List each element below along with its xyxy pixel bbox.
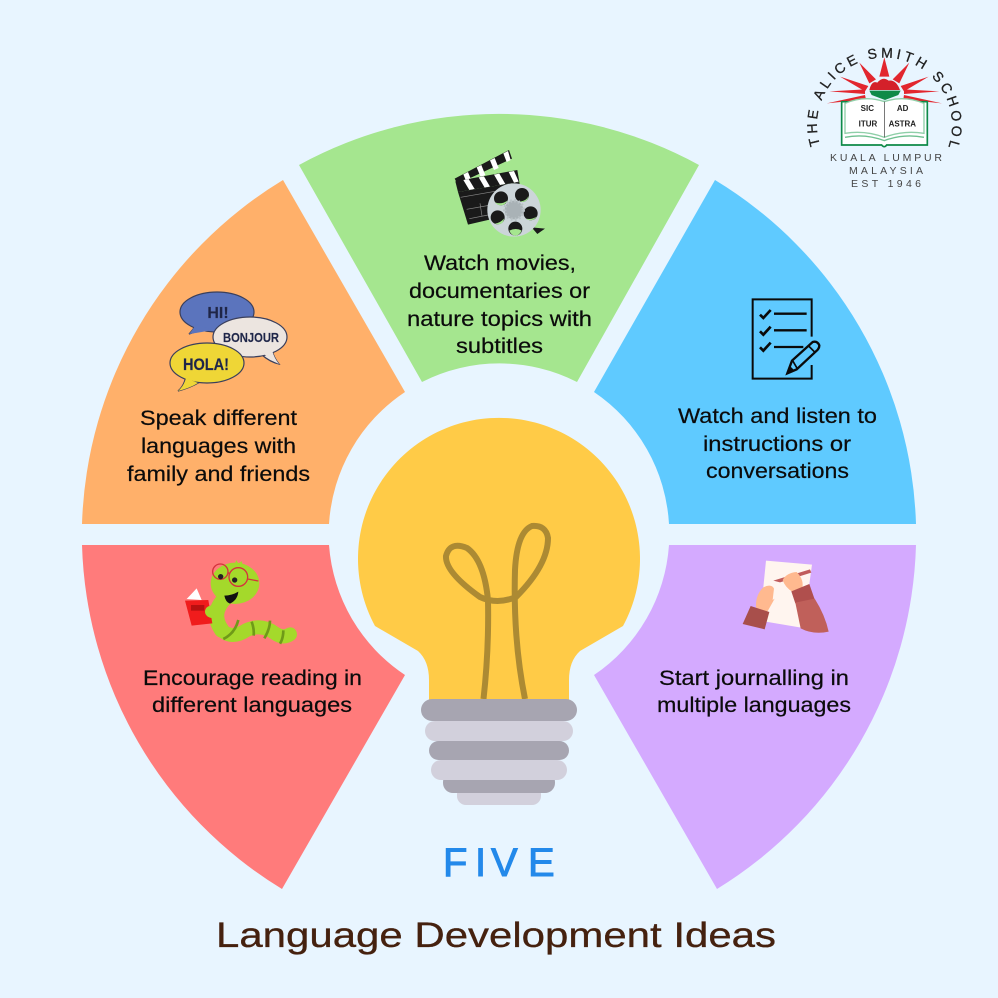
text: instructions caption (678, 405, 877, 483)
logo location text: KUALA LUMPUR (830, 152, 942, 164)
bubble: HI!: HI! (207, 305, 229, 322)
text: speaking caption (127, 407, 310, 486)
panel: movies (green) (299, 114, 699, 382)
heading: FIVE: FIVE (443, 841, 555, 885)
text: journalling caption: multiple languages (657, 694, 851, 717)
text: journalling caption (657, 667, 851, 717)
logo emblem: AD (897, 104, 909, 113)
bubble: BONJOUR: BONJOUR (223, 330, 280, 345)
text: speaking caption: family and friends (127, 463, 310, 486)
text: movies caption: Watch movies, (424, 252, 576, 275)
logo emblem: SIC (861, 104, 874, 113)
text: journalling caption: Start journalling in (659, 667, 849, 690)
bulb glass (358, 418, 640, 700)
panel: reading (red) (82, 545, 405, 889)
screw base (421, 699, 577, 805)
text: instructions caption: instructions or (703, 433, 851, 456)
text: movies caption: nature topics with (407, 308, 592, 331)
bubble: HOLA!: HOLA! (183, 355, 229, 374)
icon: clapperboard and film reel (455, 150, 545, 237)
logo arc lettering: THE ALICE SMITH SCHOOL (807, 48, 962, 148)
icon: checklist with pencil (753, 299, 819, 379)
icon: light bulb (358, 418, 640, 805)
icon: bookworm reading (185, 560, 290, 644)
logo location text: MALAYSIA (849, 165, 923, 177)
text: reading caption: Encourage reading in (143, 667, 362, 690)
text: speaking caption: languages with (141, 435, 296, 458)
logo emblem: ITUR (859, 120, 878, 129)
icon: hands writing on paper (743, 561, 829, 633)
logo emblem (827, 57, 942, 147)
logo: The Alice Smith School (807, 48, 962, 190)
text: movies caption: documentaries or (409, 280, 590, 303)
filament (446, 526, 548, 699)
text: instructions caption: Watch and listen to (678, 405, 877, 428)
text: speaking caption: Speak different (140, 407, 297, 430)
text: reading caption: different languages (152, 694, 352, 717)
panel: speaking (orange) (82, 180, 405, 524)
logo location text (830, 152, 942, 190)
panel: journalling (purple) (594, 545, 916, 889)
icon: speech bubbles (170, 292, 287, 391)
title: Language Development Ideas (216, 916, 776, 955)
logo emblem: ASTRA (889, 120, 916, 129)
text: movies caption (407, 252, 592, 358)
text: instructions caption: conversations (706, 460, 849, 483)
logo location text: EST 1946 (851, 178, 921, 190)
panel: instructions (blue) (594, 180, 916, 524)
text: reading caption (143, 667, 362, 717)
text: movies caption: subtitles (456, 335, 543, 358)
